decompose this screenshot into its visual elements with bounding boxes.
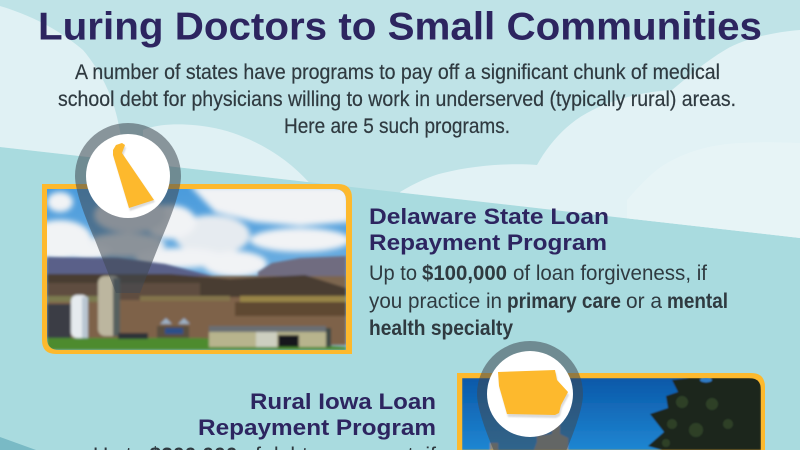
panel: Iowa photo [457, 373, 765, 450]
program text: Delaware: Up to [369, 262, 417, 285]
program heading: Iowa [198, 389, 436, 440]
title: Luring Doctors to Small Communities [38, 6, 762, 48]
program heading: Delaware: Repayment Program [369, 230, 607, 255]
icon: Iowa map pin [477, 341, 583, 450]
program text: Delaware: you practice in [369, 290, 502, 313]
right cloud [400, 30, 800, 250]
program text: Delaware: mental [667, 290, 728, 313]
program text: Delaware: primary care [507, 290, 621, 313]
left cloud [0, 6, 120, 157]
intro text [58, 61, 736, 138]
intro text: school debt for physicians willing to work in underserved (typically rural) areas. [58, 88, 736, 111]
corner wedge [0, 437, 36, 450]
intro text: A number of states have programs to pay off a significant chunk of medical [75, 61, 720, 84]
program text: Delaware: $100,000 [422, 262, 507, 285]
program heading: Iowa: Rural Iowa Loan [250, 389, 436, 414]
program text: Delaware: or a [626, 290, 662, 313]
panel: Delaware photo [28, 184, 352, 354]
icon: Delaware map pin [75, 123, 181, 293]
program text: Delaware [369, 262, 728, 340]
intro text: Here are 5 such programs. [284, 115, 510, 138]
program heading: Delaware [369, 204, 609, 255]
program text: Delaware: health specialty [369, 317, 513, 340]
program heading: Delaware: Delaware State Loan [369, 204, 609, 229]
program heading: Iowa: Repayment Program [198, 415, 436, 440]
program text: Delaware: of loan forgiveness, if [513, 262, 707, 285]
